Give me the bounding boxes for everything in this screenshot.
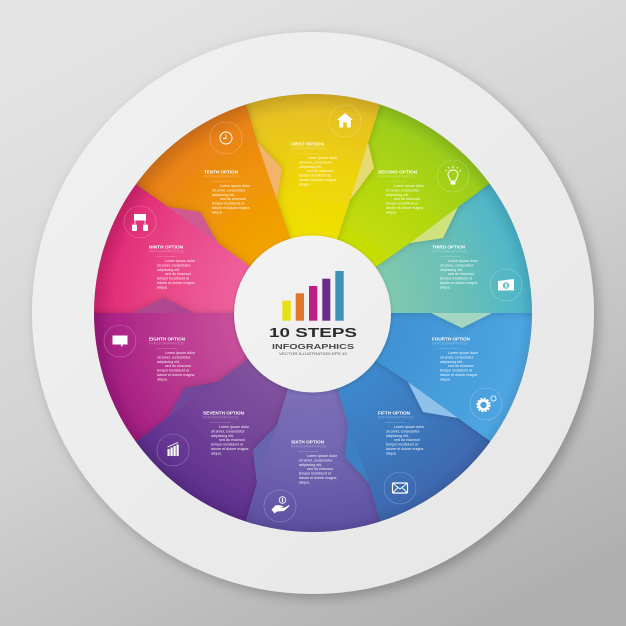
first option text: tempor incididunt ut (299, 174, 331, 178)
ninth option text: aliqua. (157, 285, 168, 289)
fold: second option (410, 207, 458, 243)
fold: sixth option (253, 425, 277, 483)
fifth option text: FIFTH OPTION (378, 411, 410, 416)
fourth option text: sed do eiusmod (448, 364, 474, 368)
seventh option text: sed do eiusmod (219, 438, 245, 442)
sixth option text (291, 440, 338, 484)
eighth option text: aliqua. (157, 377, 168, 381)
icon: hand with coin (264, 490, 296, 522)
third option text: aliqua. (440, 285, 451, 289)
second option text: aliqua. (386, 210, 397, 214)
icon: house (329, 105, 361, 137)
fifth option text: adipiscing elit, (386, 434, 409, 438)
icon: clock (210, 122, 242, 154)
first option text: FIRST OPTION (291, 142, 324, 147)
centre title (269, 326, 357, 356)
fifth option text: INFOGRAPHICS (378, 416, 414, 420)
fifth option text: Lorem ipsum dolor (394, 425, 425, 429)
fold: first option (350, 143, 374, 200)
first option text: sed do eiusmod (307, 169, 333, 173)
tenth option text: tempor incididunt ut (212, 202, 244, 206)
fold: seventh option (168, 382, 217, 417)
icon: growth chart (157, 434, 189, 466)
sixth option text: tempor incididunt ut (299, 472, 331, 476)
tenth option text: adipiscing elit, (212, 193, 235, 197)
fold: eighth option (133, 298, 194, 313)
centre title: 10 STEPS (269, 326, 357, 340)
colour wheel of ten segments (94, 94, 532, 532)
icon: banknote: $ (505, 283, 508, 289)
eighth option text: tempor incididunt ut (157, 369, 189, 373)
third option text (432, 245, 479, 289)
tenth option text: sit amet, consectetur (212, 188, 246, 192)
sixth option text: SIXTH OPTION (291, 440, 324, 445)
eighth option text: sed do eiusmod (165, 364, 191, 368)
seventh option text: tempor incididunt ut (211, 443, 243, 447)
first option text: sit amet, consectetur (299, 160, 333, 164)
third option text: Lorem ipsum dolor (448, 259, 479, 263)
fifth option text: aliqua. (386, 451, 397, 455)
ninth option text: INFOGRAPHICS (149, 250, 185, 254)
eighth option text: INFOGRAPHICS (149, 342, 185, 346)
icon: gears (470, 388, 502, 420)
third option text: sed do eiusmod (448, 272, 474, 276)
seventh option text: INFOGRAPHICS (203, 416, 239, 420)
first option text: Lorem ipsum dolor (307, 156, 338, 160)
second option text: INFOGRAPHICS (378, 175, 414, 179)
sixth option text: INFOGRAPHICS (291, 445, 327, 449)
eighth option text: adipiscing elit, (157, 360, 180, 364)
second option text: SECOND OPTION (378, 170, 417, 175)
sixth option text: Lorem ipsum dolor (307, 454, 338, 458)
central circle (234, 236, 391, 392)
ninth option text: tempor incididunt ut (157, 277, 189, 281)
fifth option text: sit amet, consectetur (386, 429, 420, 433)
fourth option text: adipiscing elit, (440, 360, 463, 364)
ninth option text: NINTH OPTION (149, 245, 183, 250)
second option text: labore et dolore magna (386, 206, 424, 210)
fifth option text: tempor incididunt ut (386, 443, 418, 447)
second option text: sed do eiusmod (394, 197, 420, 201)
ninth option text: sed do eiusmod (165, 272, 191, 276)
third option text: THIRD OPTION (432, 245, 465, 250)
fourth option text: sit amet, consectetur (440, 355, 474, 359)
icon: light bulb (437, 160, 469, 192)
fold: ninth option (168, 207, 218, 243)
eighth option text: sit amet, consectetur (157, 355, 191, 359)
first option text (291, 142, 338, 186)
ninth option text: labore et dolore magna (157, 281, 195, 285)
fold: third option (431, 313, 492, 328)
second option text (378, 170, 425, 214)
fourth option text: FOURTH OPTION (432, 337, 470, 342)
second option text: adipiscing elit, (386, 193, 409, 197)
fold: tenth option (257, 142, 282, 200)
third option text: adipiscing elit, (440, 268, 463, 272)
eighth option text (149, 337, 196, 381)
seventh option text (203, 411, 250, 455)
seventh option text: SEVENTH OPTION (203, 411, 244, 416)
tenth option text (204, 170, 251, 214)
second option text: sit amet, consectetur (386, 188, 420, 192)
first option text: labore et dolore magna (299, 178, 337, 182)
ninth option text: sit amet, consectetur (157, 263, 191, 267)
fourth option text: tempor incididunt ut (440, 369, 472, 373)
tenth option text: INFOGRAPHICS (204, 175, 240, 179)
fold: fourth option (408, 382, 458, 418)
third option text: sit amet, consectetur (440, 263, 474, 267)
third option text: tempor incididunt ut (440, 277, 472, 281)
second option text: Lorem ipsum dolor (394, 184, 425, 188)
tenth option text: TENTH OPTION (204, 170, 238, 175)
ninth option text: adipiscing elit, (157, 268, 180, 272)
third option text: INFOGRAPHICS (432, 250, 468, 254)
tenth option text: aliqua. (212, 210, 223, 214)
seventh option text: aliqua. (211, 451, 222, 455)
first option text: adipiscing elit, (299, 165, 322, 169)
tenth option text: Lorem ipsum dolor (220, 184, 251, 188)
icon: banknote (490, 269, 522, 301)
first option text: INFOGRAPHICS (291, 147, 327, 151)
third option text: labore et dolore magna (440, 281, 478, 285)
second option text: tempor incididunt ut (386, 202, 418, 206)
seventh option text: Lorem ipsum dolor (219, 425, 250, 429)
eighth option text: Lorem ipsum dolor (165, 351, 196, 355)
icon: envelope (384, 472, 416, 504)
first option text: aliqua. (299, 182, 310, 186)
eighth option text: EIGHTH OPTION (149, 337, 185, 342)
fourth option text: Lorem ipsum dolor (448, 351, 479, 355)
sixth option text: labore et dolore magna (299, 476, 337, 480)
centre bar chart (282, 271, 344, 321)
fifth option text: labore et dolore magna (386, 447, 424, 451)
icon: speech bubble (104, 325, 136, 357)
sixth option text: adipiscing elit, (299, 463, 322, 467)
tenth option text: sed do eiusmod (220, 197, 246, 201)
fourth option text: labore et dolore magna (440, 373, 478, 377)
sixth option text: sit amet, consectetur (299, 458, 333, 462)
fifth option text: sed do eiusmod (394, 438, 420, 442)
fourth option text: aliqua. (440, 377, 451, 381)
icon: org chart (124, 206, 156, 238)
centre title: INFOGRAPHICS (272, 342, 354, 351)
eighth option text: labore et dolore magna (157, 373, 195, 377)
centre title: VECTOR ILLUSTRATION EPS 10 (279, 352, 347, 356)
fifth option text (378, 411, 425, 455)
sixth option text: sed do eiusmod (307, 467, 333, 471)
seventh option text: labore et dolore magna (211, 447, 249, 451)
seventh option text: sit amet, consectetur (211, 429, 245, 433)
fourth option text (432, 337, 479, 381)
sixth option text: aliqua. (299, 480, 310, 484)
fold: fifth option (345, 425, 369, 483)
ninth option text (149, 245, 196, 289)
fourth option text: INFOGRAPHICS (432, 342, 468, 346)
ninth option text: Lorem ipsum dolor (165, 259, 196, 263)
tenth option text: labore et dolore magna (212, 206, 250, 210)
seventh option text: adipiscing elit, (211, 434, 234, 438)
